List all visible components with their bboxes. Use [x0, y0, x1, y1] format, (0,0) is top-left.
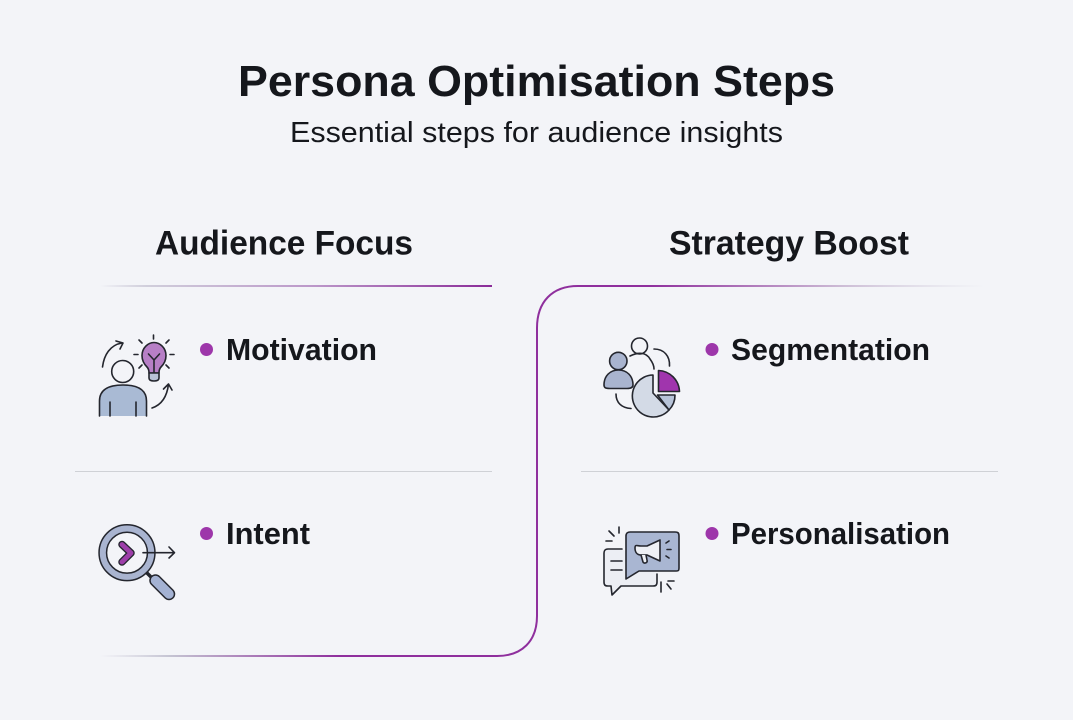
heading: Strategy Boost: Strategy Boost — [669, 224, 909, 262]
subtitle: Essential steps for audience insights — [290, 117, 783, 149]
connector line — [100, 286, 985, 656]
label: Segmentation: Segmentation — [731, 332, 930, 367]
label: Intent: Intent — [226, 516, 310, 551]
bullet — [200, 343, 213, 356]
panel: Personalisation — [604, 516, 950, 595]
icon: person with lightbulb — [100, 335, 174, 416]
bullet — [200, 527, 213, 540]
panel: Segmentation — [604, 332, 930, 417]
label: Motivation: Motivation — [226, 332, 377, 367]
icon: people with pie chart — [604, 338, 680, 417]
bullet — [706, 343, 718, 356]
label: Personalisation: Personalisation — [731, 516, 950, 551]
panel: Intent — [103, 516, 310, 594]
icon: magnifying glass with chevron — [103, 528, 174, 594]
panel: Motivation — [100, 332, 377, 416]
heading: Audience Focus: Audience Focus — [155, 224, 413, 262]
left heading rule — [100, 285, 492, 287]
title: Persona Optimisation Steps — [238, 57, 835, 106]
icon: speech bubbles with megaphone — [604, 527, 679, 595]
bullet — [706, 527, 718, 540]
